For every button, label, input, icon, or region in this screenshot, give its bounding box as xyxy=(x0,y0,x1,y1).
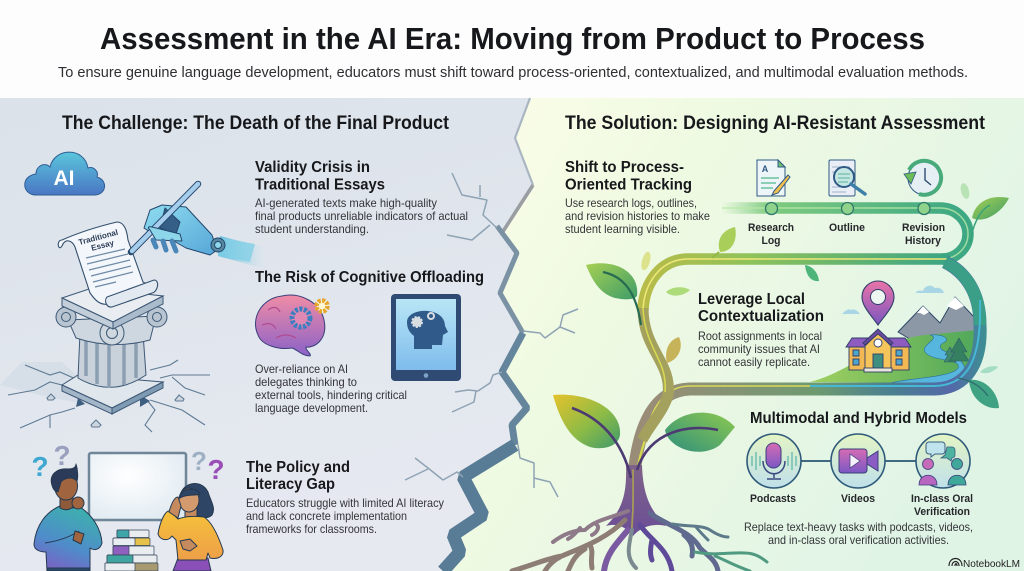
right panel background xyxy=(443,98,1024,571)
text: over-reliance xyxy=(255,363,407,415)
illustration: traditional essay scroll xyxy=(58,222,158,307)
text: policy and literacy gap: frameworks for classrooms. xyxy=(246,523,377,536)
icon: outline magnifier xyxy=(829,160,865,196)
icon: brain with gears xyxy=(255,295,328,356)
media labels xyxy=(750,493,973,518)
timeline labels: History xyxy=(905,235,942,247)
illustration: traditional essay scroll: Traditional xyxy=(78,228,119,247)
illustration: confused man xyxy=(34,464,102,571)
text: validity crisis: Validity Crisis in xyxy=(255,159,370,176)
text: shift to process-oriented tracking: Oriented Tracking xyxy=(565,176,692,194)
heading: cognitive offloading: The Risk of Cognitive Offloading xyxy=(255,269,484,286)
media labels: In-class Oral xyxy=(911,493,973,505)
text: policy and literacy gap: Literacy Gap xyxy=(246,476,335,493)
timeline labels: Outline xyxy=(829,222,865,234)
tree trunk and roots xyxy=(512,465,767,571)
text: leverage local contextualization: community issues that AI xyxy=(698,343,820,356)
icon: podcast microphone xyxy=(747,434,801,488)
icon: revision history clock xyxy=(904,161,942,195)
text: leverage local contextualization: cannot easily replicate. xyxy=(698,356,810,369)
illustration: robot hand with pen xyxy=(131,184,268,268)
text: leverage local contextualization: Contextualization xyxy=(698,308,824,325)
illustration: traditional essay scroll: Essay xyxy=(90,238,115,253)
heading: the solution: The Solution: Designing AI-Resistant Assessment xyxy=(565,113,986,134)
icon: AI cloud xyxy=(25,152,105,195)
text: policy and literacy gap: Educators struggle with limited AI literacy xyxy=(246,497,444,510)
illustration: stack of books xyxy=(105,530,158,571)
text: multimodal description xyxy=(744,521,973,547)
text: policy and literacy gap: and lack concrete implementation xyxy=(246,510,407,523)
text: policy and literacy gap: The Policy and xyxy=(246,459,350,476)
media labels: Verification xyxy=(914,506,970,518)
heading: multimodal and hybrid models: Multimodal and Hybrid Models xyxy=(750,410,967,427)
icon: research log: A xyxy=(762,164,769,174)
text: over-reliance: delegates thinking to xyxy=(255,376,357,389)
illustration: column pedestal xyxy=(56,288,167,414)
text: shift to process-oriented tracking xyxy=(565,159,710,236)
icon: tablet with head xyxy=(391,294,461,381)
icon: question marks: ? xyxy=(53,440,71,471)
media labels: Podcasts xyxy=(750,493,796,505)
logo: NotebookLM: NotebookLM xyxy=(963,558,1020,570)
text: leverage local contextualization: Root assignments in local xyxy=(698,330,822,343)
heading: the challenge: The Challenge: The Death of the Final Product xyxy=(62,113,450,134)
icon: question marks xyxy=(31,440,225,485)
icon: question marks: ? xyxy=(191,446,207,476)
illustration: confused woman xyxy=(158,483,223,571)
text: policy and literacy gap xyxy=(246,459,444,536)
icon: map pin xyxy=(862,281,894,325)
connector lines xyxy=(800,460,917,462)
icon: AI cloud: AI xyxy=(54,167,74,190)
thin crack branches xyxy=(405,173,578,497)
landscape: hill, mountains and river xyxy=(810,286,978,384)
text: multimodal description: Replace text-heavy tasks with podcasts, videos, xyxy=(744,521,973,534)
timeline labels: Revision xyxy=(902,222,945,234)
tree branches: pathway ribbons xyxy=(633,208,980,490)
icon: question marks: ? xyxy=(207,454,225,485)
text: validity crisis: final products unreliable indicators of actual xyxy=(255,210,468,223)
illustration: cracked ground under pedestal xyxy=(0,360,210,432)
central crack xyxy=(405,98,578,571)
text: over-reliance: external tools, hindering critical xyxy=(255,389,407,402)
text: shift to process-oriented tracking: Use research logs, outlines, xyxy=(565,197,697,210)
text: validity crisis: Traditional Essays xyxy=(255,176,385,194)
title: Assessment in the AI Era: Moving from Product to Process xyxy=(100,22,925,56)
text: validity crisis: AI-generated texts make high-quality xyxy=(255,197,437,210)
icon: video camera xyxy=(831,434,885,488)
text: over-reliance: Over-reliance on AI xyxy=(255,363,348,376)
timeline labels: Research xyxy=(748,222,794,234)
text: leverage local contextualization xyxy=(698,291,824,369)
text: over-reliance: language development. xyxy=(255,402,368,415)
media labels: Videos xyxy=(841,493,875,505)
left panel background xyxy=(0,98,533,571)
research timeline dots xyxy=(766,202,930,214)
illustration: whiteboard xyxy=(89,453,186,520)
text: validity crisis xyxy=(255,159,468,236)
text: leverage local contextualization: Leverage Local xyxy=(698,291,805,308)
icon: school building xyxy=(846,329,911,372)
subtitle: To ensure genuine language development, educators must shift toward process-oriented, contextualized, and multimodal evaluation methods. xyxy=(58,64,968,81)
tree leaves xyxy=(553,182,1009,478)
text: shift to process-oriented tracking: student learning visible. xyxy=(565,223,680,236)
icon: research log xyxy=(757,160,790,196)
timeline labels xyxy=(748,222,945,247)
icon: in-class oral verification xyxy=(916,434,970,488)
text: validity crisis: student understanding. xyxy=(255,223,369,236)
text: shift to process-oriented tracking: and revision histories to make xyxy=(565,210,710,223)
text: shift to process-oriented tracking: Shift to Process- xyxy=(565,159,684,176)
text: multimodal description: and in-class oral verification activities. xyxy=(768,534,949,547)
timeline labels: Log xyxy=(762,235,781,247)
icon: question marks: ? xyxy=(31,451,49,482)
header band xyxy=(0,0,1024,98)
